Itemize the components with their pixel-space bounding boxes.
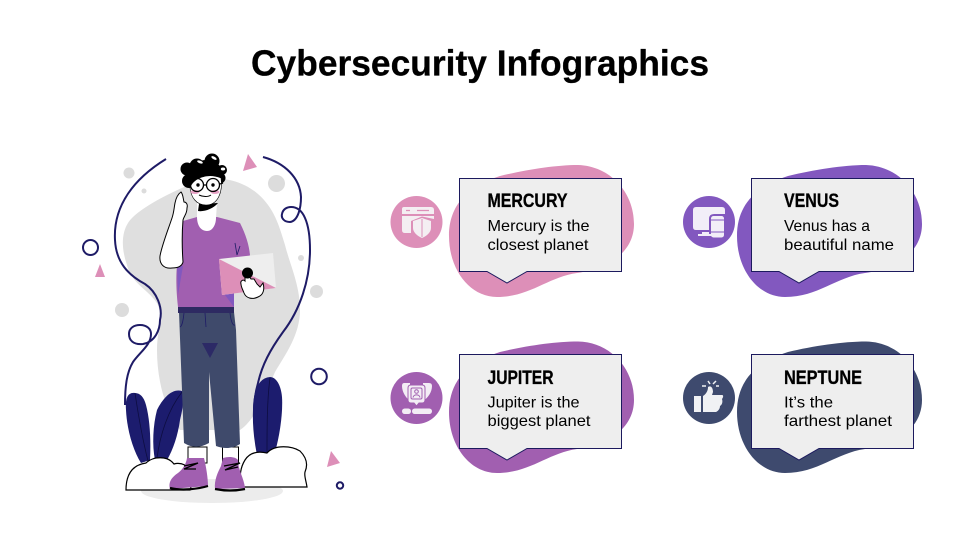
neck shadow [198,203,218,211]
callout text [784,190,894,254]
callout text: closest planet [488,237,589,254]
button dot [242,268,253,278]
left swirl line [115,159,166,405]
face [190,176,221,205]
trousers [179,312,240,448]
hair highlights [197,155,225,170]
blob [449,165,634,297]
callout [752,354,914,460]
callout text: Mercury is the [488,218,590,235]
cheeks [190,190,200,194]
socks [188,447,238,463]
panel: Venus [683,165,922,297]
rings [83,240,343,489]
right swirl line [254,157,310,455]
callout text [488,190,590,254]
hand on envelope [241,276,264,298]
background gray blob [123,178,300,430]
shoes [169,457,245,489]
icon: user chat [390,372,442,424]
callout text [488,367,591,430]
callout text: MERCURY [488,190,568,212]
right cloud [240,447,307,487]
title: Cybersecurity Infographics [251,42,709,84]
icon: thumbs up [683,372,735,424]
raised arm [160,192,187,268]
envelope flap [219,259,276,295]
belt [178,307,234,313]
gray dots [115,168,323,317]
plant leaves [126,377,282,463]
shirt shadow [177,266,234,307]
callout [460,178,622,283]
callout text: JUPITER [488,367,554,389]
left cloud [126,458,195,490]
panel: Neptune [683,342,922,473]
panel: Jupiter [390,342,634,473]
callout text: biggest planet [488,413,591,430]
illustration: person with envelope [83,154,343,503]
shirt [176,217,250,307]
blob [449,342,634,473]
callout text: It’s the [784,394,833,412]
neck and collar [197,203,217,231]
callout text: Venus has a [784,218,870,235]
callout text: farthest planet [784,413,893,430]
pink triangles [95,154,340,467]
pocket seams [180,243,240,327]
blob [737,342,922,473]
callout text: Jupiter is the [488,394,580,412]
envelope [219,253,276,295]
icon: browser shield [390,196,442,248]
panel: Mercury [390,165,634,297]
shoe soles and laces [170,463,245,490]
trousers shadow [202,343,218,358]
callout text [784,367,893,430]
callout [460,354,622,460]
eyes and mouth [196,183,200,187]
callout text: beautiful name [784,237,894,254]
callout text: NEPTUNE [784,367,862,389]
ground shadow [141,479,283,503]
callout [752,178,914,283]
icon: devices [683,196,735,248]
glasses [188,178,223,192]
blob [737,165,922,297]
callout text: VENUS [784,190,839,212]
leaf veins [135,378,270,461]
hair [180,154,227,188]
